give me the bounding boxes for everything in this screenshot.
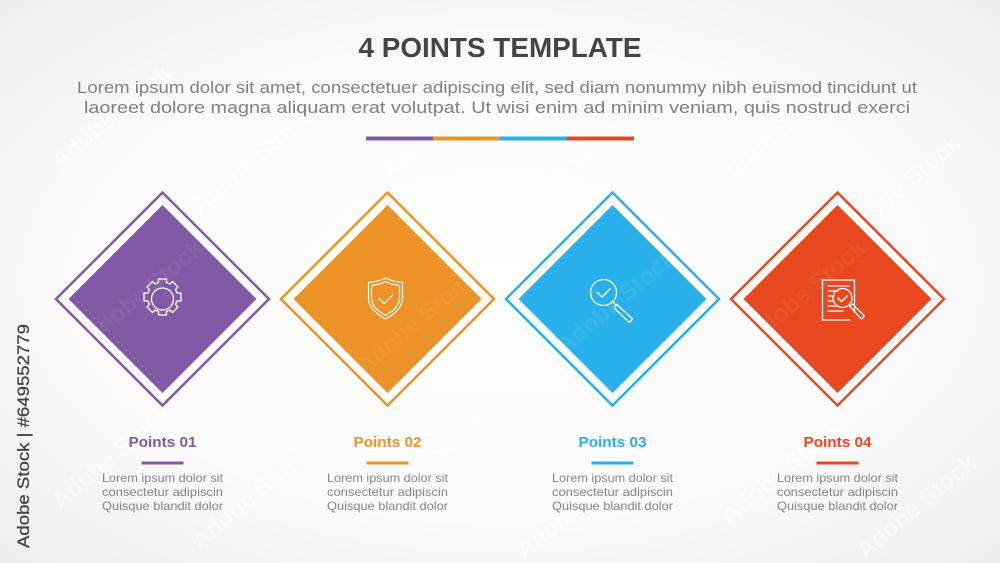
- text block: points 04: Points 04: [804, 434, 872, 451]
- text block: points 01: consectetur adipiscin: [102, 485, 223, 499]
- text block: points 01: Lorem ipsum dolor sit: [102, 471, 224, 485]
- panel: point 3 diamond: [506, 192, 719, 406]
- panel: point 4 diamond: Adobe Stock: [742, 234, 872, 350]
- icon: magnifier with check: [590, 280, 632, 322]
- text: Adobe Stock: [362, 404, 492, 520]
- text: Adobe Stock: [47, 59, 177, 175]
- text block: points 01: Quisque blandit dolor: [102, 499, 223, 513]
- text: Adobe Stock: [47, 399, 177, 515]
- text: Adobe Stock: [707, 79, 837, 195]
- text block: points 03: Points 03: [578, 434, 646, 451]
- text block: points 04: Lorem ipsum dolor sit: [777, 471, 899, 485]
- stock image credit: Adobe Stock | #649552779: [14, 324, 33, 548]
- text block: points 01: Points 01: [128, 434, 196, 451]
- text block: points 04: [777, 434, 899, 513]
- text block: points 04: Quisque blandit dolor: [777, 499, 898, 513]
- icon: document with magnifier: [822, 280, 864, 320]
- text: Adobe Stock: [837, 129, 967, 245]
- icon: gear: [144, 279, 181, 315]
- text block: points 02: Lorem ipsum dolor sit: [327, 471, 449, 485]
- description text: laoreet dolore magna aliquam erat volutpat. Ut wisi enim ad minim veniam, quis nostrud exerci: [84, 98, 910, 117]
- text block: points 02: [327, 434, 449, 513]
- text block: points 02: Quisque blandit dolor: [327, 499, 448, 513]
- panel: point 2 diamond: [281, 192, 494, 406]
- text: Adobe Stock: [187, 439, 317, 555]
- text: Adobe Stock: [717, 414, 847, 530]
- colour divider bar: [366, 136, 634, 140]
- text block: points 03: [552, 434, 674, 513]
- panel: point 4 diamond: [731, 192, 944, 406]
- panel: point 3 diamond: Adobe Stock: [552, 244, 682, 360]
- text: Adobe Stock: [187, 104, 317, 220]
- text: Adobe Stock: [377, 69, 507, 185]
- panel: point 2 diamond: Adobe Stock: [352, 264, 482, 380]
- text block: points 01: [102, 434, 224, 513]
- title: 4 POINTS TEMPLATE: [358, 32, 642, 63]
- description text: [77, 78, 917, 117]
- text block: points 04: consectetur adipiscin: [777, 485, 898, 499]
- text block: points 02: Points 02: [354, 434, 422, 451]
- text block: points 03: Lorem ipsum dolor sit: [552, 471, 674, 485]
- text: Adobe Stock: [852, 449, 982, 563]
- icon: shield with check: [368, 278, 402, 319]
- text block: points 02: consectetur adipiscin: [327, 485, 448, 499]
- panel: point 1 diamond: [56, 192, 269, 406]
- text: Adobe Stock: [502, 114, 632, 230]
- text: Adobe Stock: [512, 449, 642, 563]
- text block: points 03: Quisque blandit dolor: [552, 499, 673, 513]
- panel: point 1 diamond: Adobe Stock: [79, 234, 209, 350]
- description text: Lorem ipsum dolor sit amet, consectetuer adipiscing elit, sed diam nonummy nibh euismod tincidunt ut: [77, 78, 917, 97]
- text block: points 03: consectetur adipiscin: [552, 485, 673, 499]
